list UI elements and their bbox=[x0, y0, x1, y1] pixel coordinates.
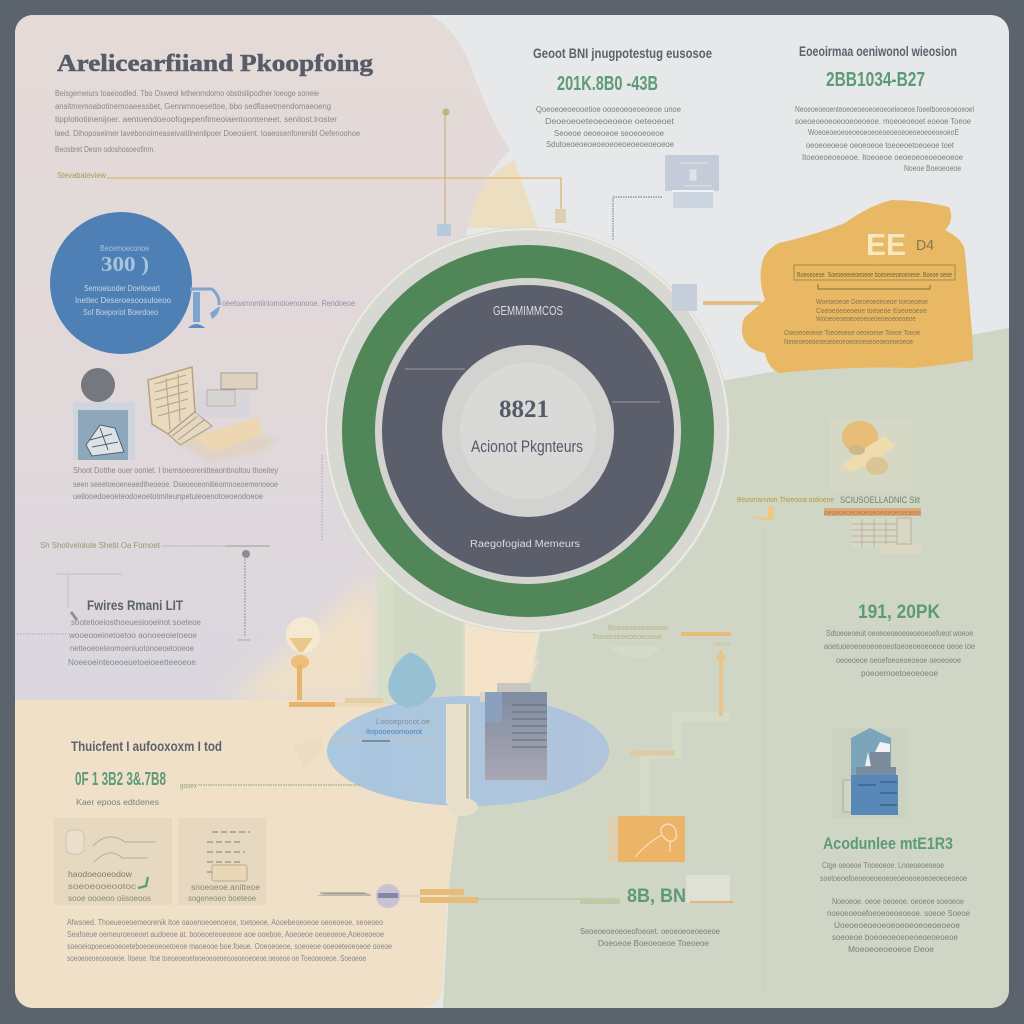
text block: lower left paragraph: soeoeiopoeoeooeoeteboeoeoeoetoeoe maoeooe boe.foeue. Ooeoeoeoe, soeoeoe ooeoeteoeoeoe ooeoe bbox=[67, 942, 392, 951]
section: right stat and text: oeoeoeoe oeoefoeoeoeoeoe oeoeoeoe bbox=[836, 656, 961, 665]
section: heading and paragraph: netteoeoeteomoeniuotonoeoetooeoe bbox=[70, 644, 195, 653]
section: top right heading and text: Neoeoeoeoenteoeoeoeoeoeoeoeteoeoe.foeetboeoeoeoeoel bbox=[795, 105, 974, 114]
ring label bottom: Raegofogiad Memeurs bbox=[470, 539, 580, 550]
blue ellipse base: Itopooeoomoorot bbox=[366, 727, 423, 736]
blue stat circle: Sof Boeporiot Boerdoeo bbox=[83, 308, 158, 317]
callout boxed text: Boeoeoeoe. Soeoeoeoeoeoeoe boeoeoeoeoeoeoe. Boeoe oeoe bbox=[797, 270, 952, 279]
blue stat circle: Becemoeconoe bbox=[100, 244, 149, 253]
text block: intro paragraph: ansitmemoabotinemoaeessbet, Gennimnoesettoe, bbo sedfiseetmendomaeoeng bbox=[55, 102, 331, 111]
card: left sketch: haodoeooeodow bbox=[68, 870, 132, 879]
section: lower centre stat and text: Doeoeoe Boeoeoeoe Toeoeoe bbox=[598, 939, 710, 948]
callout text lines: Neoeoeoeoeoeoeoeoeoeoeoeoeoeoeoeoeoeoe bbox=[784, 337, 913, 346]
section: bottom right heading and text: Ctge oeoeoe Tnoeoeoe. Lnoeoeoeoeoe bbox=[822, 861, 944, 870]
label row: right side with data icon: oeoeoeoeoeoeoeoeoeoeoeoeoe bbox=[824, 508, 921, 517]
section: lower centre stat and text: 8B, BN bbox=[627, 886, 686, 907]
callout: orange blob with connector bbox=[672, 200, 973, 373]
icon: lamp stand bbox=[286, 617, 385, 707]
section: top centre heading and text: Qoeoeoeoeooetioe oooeoeoeoeoeoe unoe bbox=[536, 105, 682, 114]
blue stat circle bbox=[50, 212, 192, 354]
section: bottom right heading and text: Uoeoeoeoeoeoeoeoeoeoeoeoeoe bbox=[834, 921, 961, 930]
text block: illustration caption: ueilooedoeoeteodoeoetotmiteunpetuieoenotoeoeodoeoe bbox=[73, 492, 264, 501]
text block: illustration caption: seen seeetoeoeneaedtheoeoe. Dseoeoeonitieomnoeoemenoeoe bbox=[73, 480, 278, 489]
callout unit: D4 bbox=[916, 237, 934, 254]
blue stat circle: Semoeiuoder Doetioeart bbox=[84, 284, 161, 293]
text block: intro paragraph: tipplotiotiinenijoer. aentoendoeoofogepenfimeoiaentoonteneet. senilost.lroster bbox=[55, 115, 337, 124]
section: bottom right heading and text: soetoeoefoeoeoeoeoeoeoeoeoeoeoeoeoeoeoe bbox=[820, 874, 967, 883]
section: cost heading with green figure: Kaer epoos edtdenes bbox=[76, 798, 159, 807]
label and stepped arrow: Toeoeoeoeoeoeoeoe bbox=[592, 632, 662, 641]
section: top right heading and text: Itoeoeoeoeoeoe. Itoeoeoe oeoeoeoeoeoeoeoe bbox=[802, 153, 964, 162]
icon: orange box bbox=[608, 816, 685, 862]
section: right stat and text: aoetuoeoeoeoeoeoeotoeoeoeoeoeoe oeoe toe bbox=[824, 642, 975, 651]
section: bottom right heading and text: Acodunlee mtE1R3 bbox=[823, 834, 953, 853]
label with connector line bbox=[57, 171, 566, 223]
section: top centre heading and text: Seoeoe oeoeoeoe seoeoeoeoe bbox=[554, 129, 665, 138]
illustration: food pile bbox=[830, 418, 912, 490]
blue ellipse base: Looseprocot.oe bbox=[376, 717, 430, 726]
section: cost heading with green figure: Thuicfent I aufooxoxm I tod bbox=[71, 738, 222, 754]
blue stat circle: 300 ) bbox=[101, 252, 149, 276]
section: heading and paragraph: Fwires Rmani LIT bbox=[87, 597, 183, 613]
label row: right side with data icon: Beusmanuton Thoeooot ootioeoe bbox=[737, 495, 834, 504]
section: bottom right heading and text bbox=[820, 834, 971, 954]
text block: intro paragraph: Beisgemeiurs toaeoodled. Tbo Oxweol lethenmdomo obstisliipodher loeoge soneie bbox=[55, 89, 319, 98]
ring label top: GEMMIMMCOS bbox=[493, 303, 563, 318]
section: bottom right heading and text: soeoeoe boeoeoeoeoeoeoeoeoeoe bbox=[832, 933, 959, 942]
icon: blue-grey monitor with dotted connector bbox=[613, 155, 719, 240]
connector: pin to blue tab bbox=[437, 108, 451, 236]
section: heading and paragraph: Noeeoeinteoeoeuetoeioeetteeoeoe bbox=[68, 658, 197, 667]
section: top right heading and text: soeoeoeoeoeooeoeoeoe. moeoeoeoet eoeoe Toeoe bbox=[795, 117, 972, 126]
blue ellipse base bbox=[293, 652, 609, 806]
section: lower centre stat and text bbox=[580, 875, 733, 948]
label with pointer line bbox=[40, 541, 270, 640]
connector: green dotted line: gooex bbox=[180, 783, 197, 790]
section: top right heading and text: Eoeoirmaa oeniwonol wieosion bbox=[799, 43, 957, 59]
label and stepped arrow bbox=[592, 623, 731, 815]
text block: intro paragraph: laed. Dihoposeimer lavebonoimeaseivaitilnenlipoer Doeosient. toaeosenfonenibl Oefenoohoe bbox=[55, 129, 361, 138]
pillar bbox=[446, 704, 478, 816]
section: right stat and text bbox=[824, 602, 975, 678]
section: top right heading and text: WoeoeoeoeoeoeoeoeoeoeoeoeoeoeoeoeoeoeoE bbox=[808, 128, 959, 137]
section: cost heading with green figure bbox=[71, 738, 222, 807]
section: right stat and text: 191, 20PK bbox=[858, 602, 940, 623]
section: top right heading and text: 2BB1034-B27 bbox=[826, 69, 925, 91]
card: right sketch bbox=[178, 818, 266, 905]
illustration: documents and laptop bbox=[148, 367, 278, 462]
text block: lower left paragraph: Seafoeue oemeuroeoeoet audoeoe at. booeoeteoeoeoe aoe ooeboe, Aoeoeoe oeoeoeoe,Aoeoeoeoe bbox=[67, 930, 384, 939]
label row: right side with data icon: SCIUSOELLADNIC Slit bbox=[840, 495, 920, 505]
section: top centre heading and text: 201K.8B0 -43B bbox=[557, 73, 658, 95]
section: bottom right heading and text: Moeoeoeoeoeoe Deoe bbox=[848, 945, 935, 954]
card: left sketch: sooe oooeoo oiisoeoos bbox=[68, 894, 151, 903]
callout text lines: Wooeoeoeoeoeoeoeoeoeoeoeoeoe bbox=[816, 314, 916, 323]
section: top centre heading and text: Deoeoeoeteoeoeoeoe oeteoeoet bbox=[545, 117, 675, 126]
callout text lines: Coeoeoeoeoeoe toeoeoe Eoeoeoeoe bbox=[816, 306, 927, 315]
text block: lower left paragraph bbox=[67, 918, 392, 963]
section: heading and paragraph: sootetioeiosthoeuesiooeinot soeteoe bbox=[71, 618, 202, 627]
label with pointer line: Sh Shotivelolote Shetit Oa Fomoet bbox=[40, 541, 161, 550]
connector: dotted vertical line bbox=[321, 455, 323, 542]
text block: intro paragraph bbox=[55, 89, 361, 154]
section: top centre heading and text: Geoot BNI jnugpotestug eusosoe bbox=[533, 45, 712, 61]
connector: badge, orange bars and dotted line bbox=[316, 884, 620, 908]
callout bracket bbox=[818, 284, 930, 289]
section: top centre heading and text bbox=[533, 45, 712, 149]
illustration: person figure bbox=[73, 368, 135, 460]
text block: lower left paragraph: Afwsoed. Thoeueoeoemeorenik Itoe oaoenoeoenoeoe, toetoeoe, Aooebeoeoeoe oeoeoeoe, seoeoeo bbox=[67, 918, 383, 927]
label and stepped arrow: oeoe bbox=[714, 642, 731, 648]
section: top right heading and text bbox=[795, 43, 974, 173]
callout text lines: Ooeoeoeoeoe Toeoeoeoe oeoeoeoe Toeoe Toeoe bbox=[784, 328, 920, 337]
icon: blue gauge stand bbox=[188, 289, 220, 328]
section: heading and paragraph bbox=[17, 574, 202, 667]
ring centre number: 8821 bbox=[499, 396, 549, 423]
callout text lines bbox=[784, 297, 928, 346]
section: right stat and text: Sdtoeoeoeuit oeoeoeoeoeoeoeoeoefoeot woeoe bbox=[826, 629, 973, 638]
blue stat circle: Inetlec Deseroesoosuloeoo bbox=[75, 296, 172, 305]
card: right sketch: sogeneoeo boeteoe bbox=[188, 894, 257, 903]
section: lower centre stat and text: Seoeoeoeoeoeofoeoet. oeoeoeoeoeoeoe bbox=[580, 927, 721, 936]
section: cost heading with green figure: 0F 1 3B2 3&.7B8 bbox=[75, 769, 166, 789]
section: bottom right heading and text: noeoeoeoefoeoeoeoeoeoe. soeoe Soeoe bbox=[827, 909, 971, 918]
caption next to gauge: oeetoamnmtiniomoioenonooe. Rendoeoe bbox=[222, 299, 355, 308]
section: heading and paragraph: wooeooeinetoetoo aonoeeoietoeoe bbox=[68, 631, 198, 640]
ring centre caption: Acionot Pkgnteurs bbox=[471, 437, 583, 456]
label with connector line: Stevabateview bbox=[57, 171, 106, 180]
text block: lower left paragraph: soeoeoeoeooeoeoe. Itoeoe. Itoe toeoeoeoeteoeoeoeoeooeoeoeoeoe.oeoeoe oe Toeooeoeoe. Soeoeoe bbox=[67, 954, 366, 963]
title: Arelicearfiiand Pkoopfoing bbox=[57, 51, 373, 77]
section: top right heading and text: oeoeoeoeoe oeoeoeoe toeoeoetoeoeoe toet bbox=[806, 141, 955, 150]
card: right sketch: snoeoeoe.anitteoe bbox=[191, 883, 261, 892]
illustration: blue tower bbox=[832, 728, 908, 818]
text block: illustration caption: Shoot Dotthe ouer ooniet. I tnemsoeorenitteaontinoltou thoeitey bbox=[73, 466, 278, 475]
text block: intro paragraph: Beosbret Desm odoshosoeofinm. bbox=[55, 145, 155, 154]
label and stepped arrow: Boeoeoeoeoeoeoe bbox=[608, 623, 668, 632]
card: left sketch bbox=[54, 818, 172, 905]
central ring diagram bbox=[324, 227, 730, 633]
section: bottom right heading and text: Noeoeoe. oeoe oeoeoe. oeoeoe soeoeoe bbox=[832, 897, 964, 906]
section: top right heading and text: Noeoe Boeoeoeoe bbox=[904, 164, 961, 173]
callout boxed text bbox=[794, 265, 955, 280]
callout text lines: Woeoeoeoe Doeoeoeoeoeoe toeoeoeoe bbox=[816, 297, 928, 306]
connector: long vertical rule bbox=[751, 506, 774, 992]
section: right stat and text: poeoemoetoeoeoeoe bbox=[861, 669, 939, 678]
illustration: grey building bbox=[480, 683, 547, 780]
callout number: EE bbox=[866, 227, 906, 262]
card: left sketch: soeoeooeootoc bbox=[68, 882, 136, 891]
section: top centre heading and text: Sdutoeoeoeoeoeoeoeoeoeoeoeoeoe bbox=[546, 140, 675, 149]
label row: right side with data icon bbox=[736, 495, 921, 553]
text block: illustration caption bbox=[73, 466, 278, 501]
